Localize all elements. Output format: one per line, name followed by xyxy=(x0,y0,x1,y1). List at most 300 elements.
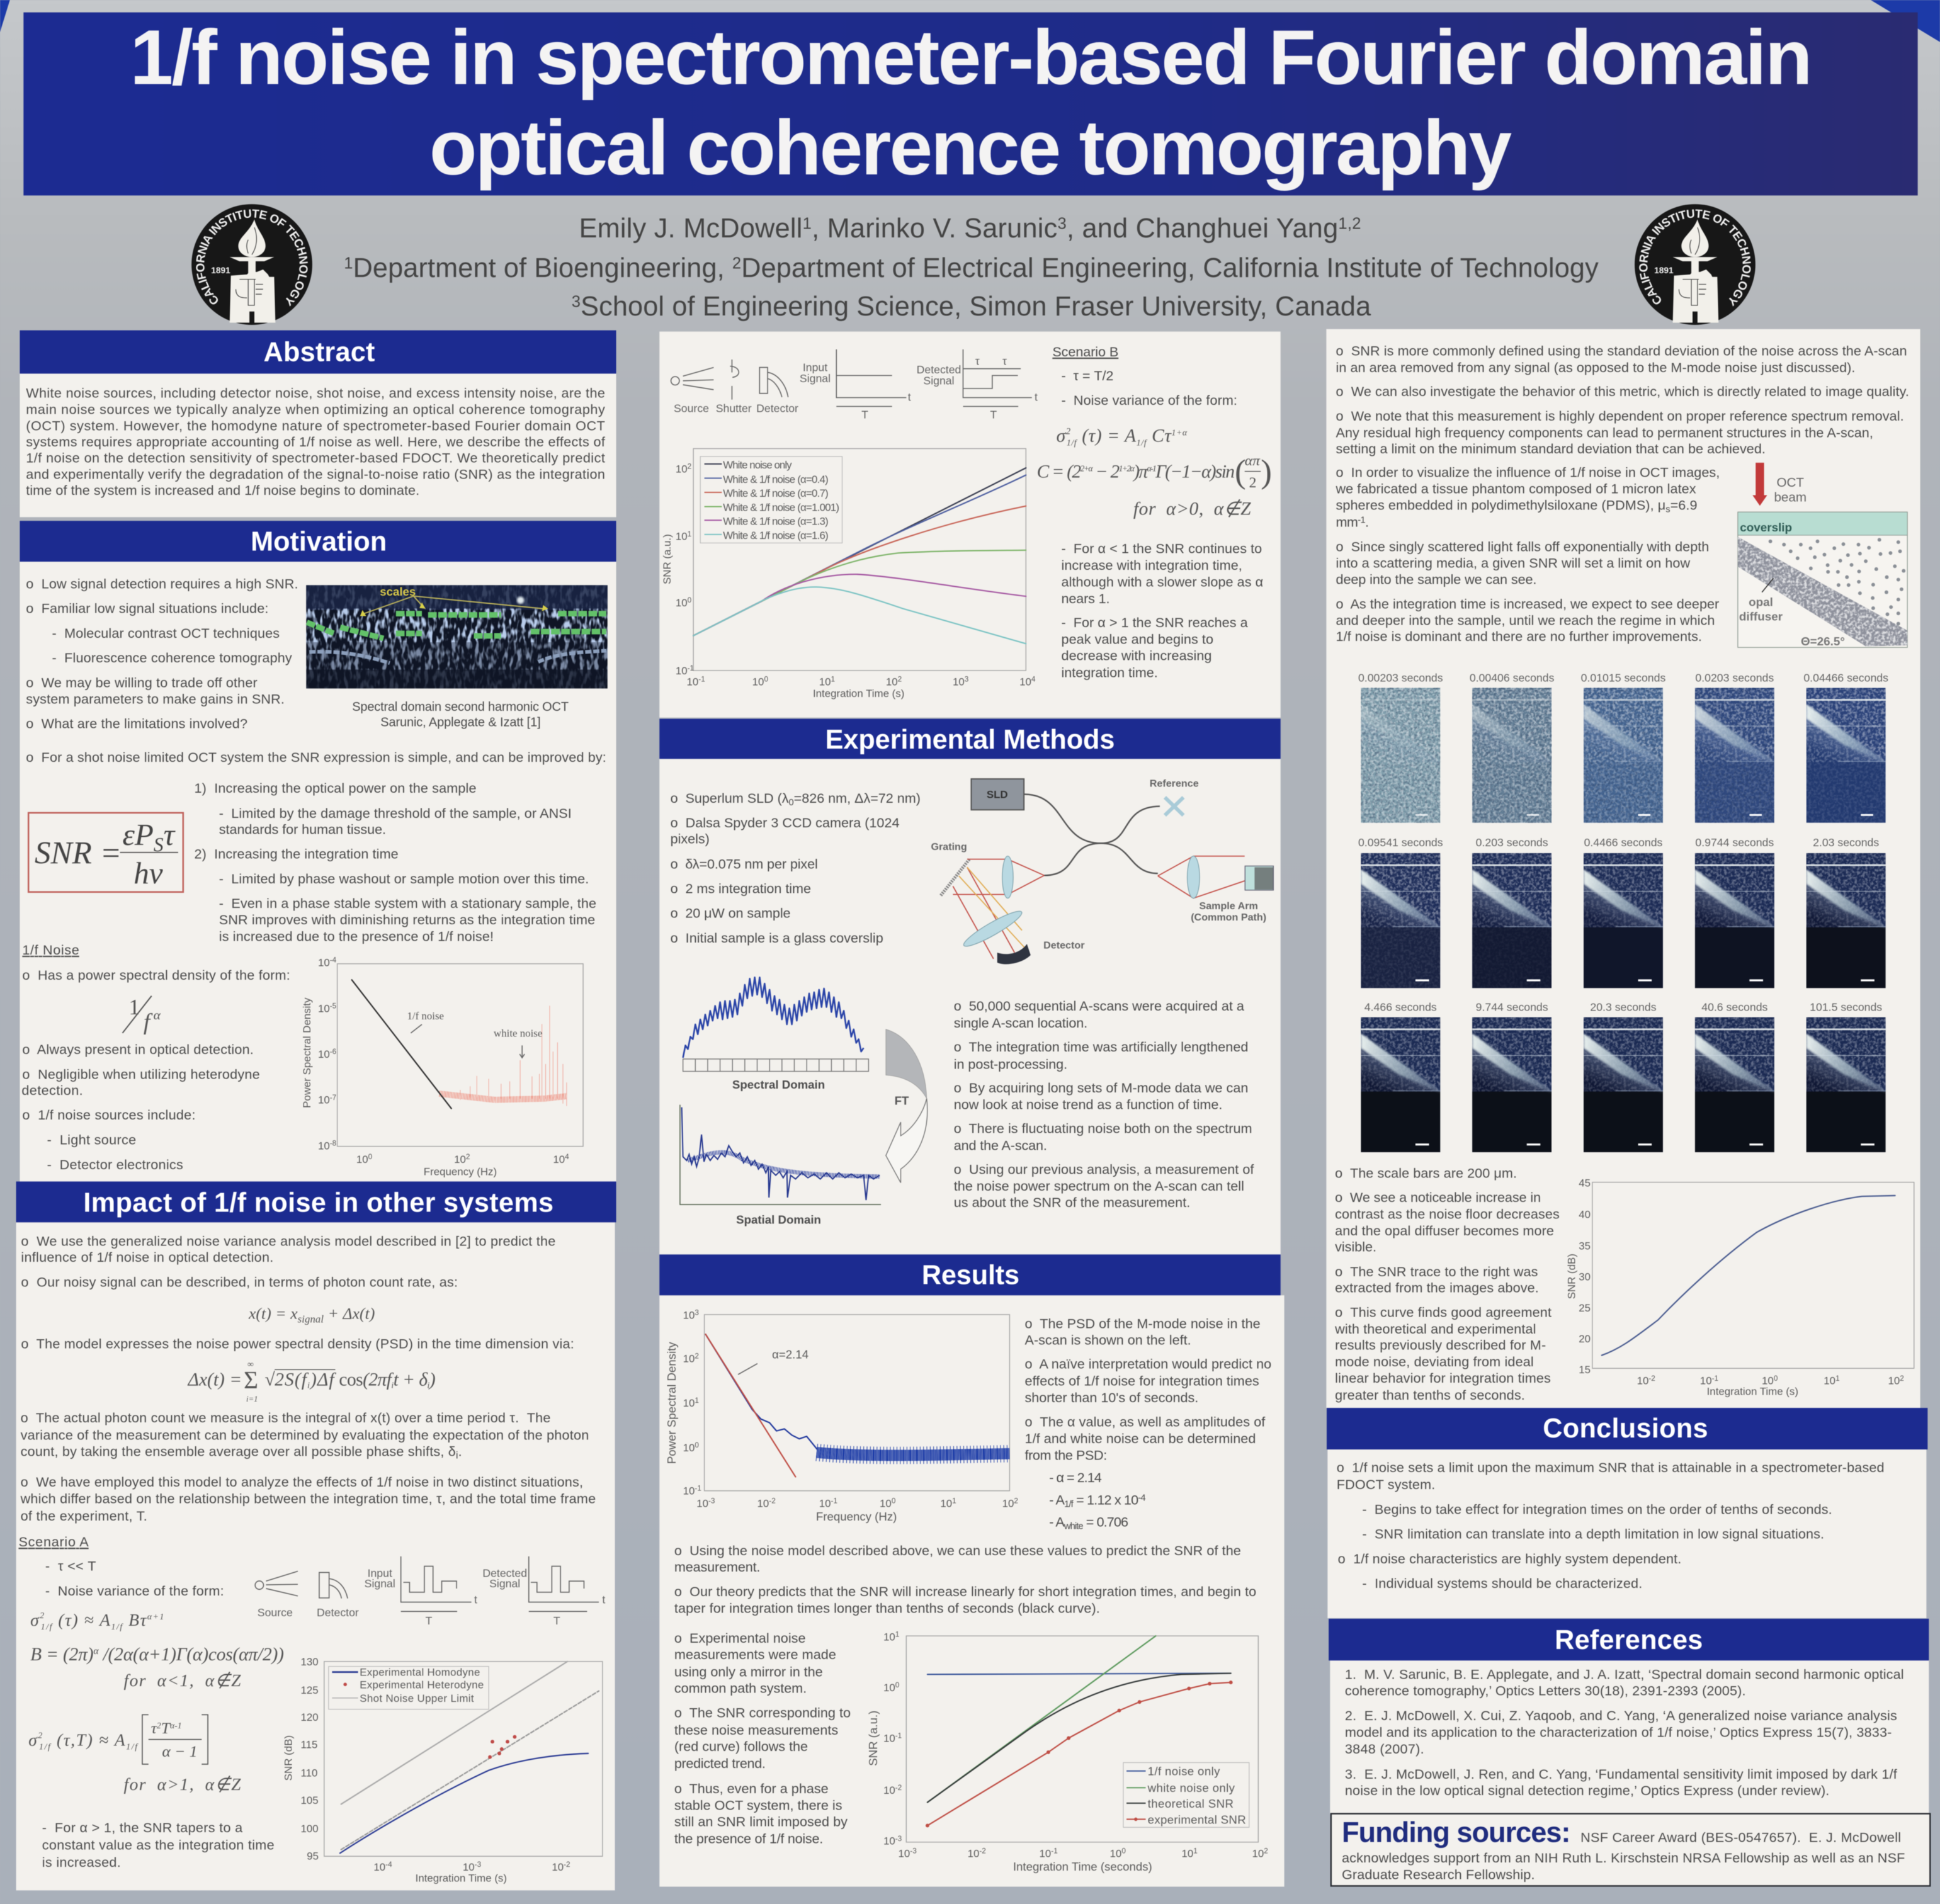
authors and affiliations: , and Changhuei Yang xyxy=(1067,213,1338,244)
equation: noise expansion: ∞ xyxy=(247,1359,254,1369)
equations: scenario B: απ xyxy=(1245,453,1261,469)
image analysis notes: o The SNR trace to the right was xyxy=(1335,1264,1538,1279)
results notes: experiment: still an SNR limit imposed by xyxy=(674,1814,848,1830)
chart: SNR for several alpha values: 10 xyxy=(819,676,831,688)
chart: theoretical and experimental SNR: -3 xyxy=(910,1847,917,1855)
chart: SNR from images: -2 xyxy=(1648,1374,1655,1383)
results notes: experiment: common path system. xyxy=(674,1680,807,1696)
title banner xyxy=(23,13,1918,195)
equations: scenario B: 1+2α xyxy=(1119,464,1135,473)
image metric notes: setting a limit on the minimum standard deviation that can be achieved. xyxy=(1336,441,1766,456)
image row labels: 0.9744 seconds xyxy=(1695,836,1774,849)
chart: measured noise PSD: 10 xyxy=(880,1497,892,1509)
image metric notes: o In order to visualize the influence of 1/f noise in OCT images, xyxy=(1336,465,1720,480)
diagram: tissue phantom: Θ=26.5° xyxy=(1801,635,1845,648)
image analysis notes: with theoretical and experimental xyxy=(1334,1321,1536,1337)
chart: power spectral density: -7 xyxy=(330,1094,336,1102)
authors and affiliations: 3 xyxy=(1057,215,1067,233)
chart: power spectral density: 1/f noise xyxy=(407,1010,444,1022)
chart: SNR from images: 1 xyxy=(1835,1374,1840,1383)
diagram: fiber OCT system: Sample Arm xyxy=(1199,900,1258,912)
image analysis notes: visible. xyxy=(1335,1239,1376,1255)
subheading: 1/f noise: 1/f Noise xyxy=(22,942,79,958)
reference list: 3. E. J. McDowell, J. Ren, and C. Yang, ‘Fundamental sensitivity limit imposed by dark 1/f xyxy=(1345,1766,1898,1782)
results notes: experiment: o The SNR corresponding to xyxy=(674,1704,851,1720)
diagram: scenario B signal schematic: Detected xyxy=(917,363,961,376)
motivation bullets: system parameters to make gains in SNR. xyxy=(26,691,285,707)
panel: funding sources xyxy=(1331,1814,1930,1886)
motivation bullets: - Molecular contrast OCT techniques xyxy=(52,625,280,641)
scenario B notes: integration time. xyxy=(1062,664,1158,680)
diagram: scenario A signal schematic: Source xyxy=(258,1606,293,1619)
scenario A note: is increased. xyxy=(42,1854,121,1870)
results notes: experiment: the presence of 1/f noise. xyxy=(674,1831,823,1847)
impact body text: of the experiment, T. xyxy=(21,1508,147,1524)
equations: scenario A: 2 xyxy=(38,1731,42,1740)
diagram: fiber OCT system: SLD xyxy=(987,788,1008,800)
chart: power spectral density: -6 xyxy=(330,1048,337,1056)
scenario B definition xyxy=(1062,368,1237,408)
diagram: fiber OCT system: Detector xyxy=(1043,939,1085,951)
conclusions text: FDOCT system. xyxy=(1337,1476,1435,1492)
scenario B notes: decrease with increasing xyxy=(1062,648,1211,664)
results notes: experiment: o Experimental noise xyxy=(674,1630,806,1646)
abstract body text xyxy=(26,385,606,498)
abstract body text: main noise sources we typically analyze when optimizing an optical coherence tomography xyxy=(26,401,605,417)
chart: SNR homodyne versus heterodyne: 120 xyxy=(300,1711,319,1723)
authors and affiliations: School of Engineering Science, Simon Fraser University, Canada xyxy=(581,292,1371,322)
diagram: scenario B signal schematic: t xyxy=(1035,391,1038,404)
icon: Caltech seal right: CALIFORNIA INSTITUTE OF TECHNOLOGY xyxy=(1638,209,1752,307)
improvement list: - Limited by phase washout or sample motion over this time. xyxy=(219,871,589,887)
improvement list: standards for human tissue. xyxy=(219,821,386,837)
equations: scenario A: α xyxy=(93,1646,99,1657)
diagram: scenario A signal schematic: Detected xyxy=(482,1567,527,1579)
methods notes: in post-processing. xyxy=(954,1056,1067,1072)
chart: SNR homodyne versus heterodyne: -3 xyxy=(475,1861,482,1869)
results notes: PSD: = 0.706 xyxy=(1083,1514,1128,1530)
image metric notes: o As the integration time is increased, we expect to see deeper xyxy=(1336,596,1719,611)
heading: funding sources: Funding sources: xyxy=(1342,1816,1570,1849)
image: 0.4466 seconds xyxy=(1584,853,1663,988)
image: 0.01015 seconds xyxy=(1584,688,1663,823)
results notes: PSD: shorter than 10's of seconds. xyxy=(1025,1390,1198,1405)
reference list: noise in the low optical signal detection regime,’ Optics Express (under review). xyxy=(1345,1782,1829,1798)
equations: scenario A: for α<1, α∉Z xyxy=(123,1670,241,1690)
panel: abstract xyxy=(20,331,616,517)
chart: theoretical and experimental SNR: 10 xyxy=(1110,1847,1121,1859)
equation: noise expansion: i xyxy=(307,1381,310,1390)
diagram: tissue phantom: opal xyxy=(1749,596,1773,609)
equations: scenario B: α-1 xyxy=(1147,464,1157,473)
image metric notes: we fabricated a tissue phantom composed of 1 micron latex xyxy=(1336,480,1696,496)
diagram: scenario B signal schematic: T xyxy=(861,409,868,421)
equation: 1/f to the alpha: f xyxy=(144,1009,153,1035)
equation: noise expansion: i xyxy=(428,1381,430,1390)
system parameters list: o Superlum SLD (λ xyxy=(671,790,789,806)
equations: scenario B: (τ) = A xyxy=(1077,426,1137,446)
results notes: PSD: = 1.12 x 10 xyxy=(1073,1492,1138,1507)
authors and affiliations: , Marinko V. Sarunic xyxy=(812,213,1057,244)
chart: measured noise PSD: -1 xyxy=(695,1485,701,1493)
chart: SNR for several alpha values: White & 1/f noise (α=1.6) xyxy=(723,530,829,541)
panel: experimental methods xyxy=(659,719,1281,1254)
chart: SNR from images: 0 xyxy=(1774,1374,1778,1383)
chart: theoretical and experimental SNR: 10 xyxy=(1252,1847,1264,1859)
heading: references: References xyxy=(1555,1625,1703,1655)
methods notes: o By acquiring long sets of M-mode data we can xyxy=(954,1080,1248,1096)
chart: SNR from images: 10 xyxy=(1888,1375,1900,1387)
chart: theoretical and experimental SNR: Integration Time (seconds) xyxy=(1013,1860,1152,1873)
chart: measured noise PSD: 10 xyxy=(940,1497,952,1509)
chart: SNR homodyne versus heterodyne: Experimental Homodyne xyxy=(360,1666,480,1678)
panel: scenario B xyxy=(659,332,1281,718)
image metric notes: and deeper into the sample, until we reach the regime in which xyxy=(1336,612,1715,628)
image: 2.03 seconds xyxy=(1807,853,1886,988)
system parameters list: =826 nm, Δλ=72 nm) xyxy=(794,790,921,806)
panel: references xyxy=(1329,1619,1929,1814)
chart: measured noise PSD: 10 xyxy=(757,1497,769,1509)
equations: scenario B: − 2 xyxy=(1092,462,1120,482)
improvement list: - Limited by the damage threshold of the sample, or ANSI xyxy=(219,805,572,821)
image row labels: 0.04466 seconds xyxy=(1803,672,1888,684)
chart: theoretical and experimental SNR: 2 xyxy=(1264,1847,1268,1855)
chart: theoretical and experimental SNR: 10 xyxy=(1040,1847,1051,1859)
diagram: scenario B signal schematic: τ xyxy=(975,355,980,368)
icon: OCT beam arrow: beam xyxy=(1774,490,1807,505)
image metric notes: into a scattering media, a given SNR will set a limit on how xyxy=(1336,555,1690,570)
chart: SNR homodyne versus heterodyne: Integration Time (s) xyxy=(416,1873,507,1884)
chart: SNR for several alpha values: -1 xyxy=(698,676,705,684)
equations: scenario A: 1/f xyxy=(126,1742,139,1751)
system parameters list: pixels) xyxy=(671,830,710,846)
image metric notes: o We note that this measurement is highly dependent on proper reference spectrum removal. xyxy=(1336,408,1904,424)
image row labels: 0.00203 seconds xyxy=(1358,672,1443,684)
diagram: scenario B signal schematic: Source xyxy=(674,402,709,414)
funding text: NSF Career Award (BES-0547657). E. J. McDowell xyxy=(1580,1830,1901,1845)
results notes: PSD: 1/f xyxy=(1064,1499,1074,1509)
image metric notes: =6.9 xyxy=(1671,497,1697,513)
chart: power spectral density: 10 xyxy=(454,1153,466,1165)
heading: impact: Impact of 1/f noise in other systems xyxy=(83,1188,553,1218)
scenario B notes: nears 1. xyxy=(1062,591,1110,606)
chart: theoretical and experimental SNR xyxy=(866,1631,1268,1873)
caption: OCT image xyxy=(352,700,569,729)
image row labels: 9.744 seconds xyxy=(1476,1000,1548,1013)
methods notes: us about the SNR of the measurement. xyxy=(954,1194,1190,1210)
chart: measured noise PSD: -2 xyxy=(769,1497,776,1505)
conclusions text: - SNR limitation can translate into a depth limitation in low signal situations. xyxy=(1362,1526,1824,1542)
equations: scenario A xyxy=(28,1610,284,1794)
image: 40.6 seconds xyxy=(1695,1017,1774,1152)
chart: theoretical and experimental SNR: -2 xyxy=(979,1847,986,1855)
chart: SNR for several alpha values: White noise only xyxy=(723,459,792,471)
impact body text: o Our noisy signal can be described, in terms of photon count rate, as: xyxy=(21,1274,458,1290)
equations: scenario A: α-1 xyxy=(170,1721,182,1730)
authors and affiliations: 1 xyxy=(803,215,812,233)
scenario B notes: - For α > 1 the SNR reaches a xyxy=(1062,615,1249,630)
chart: SNR for several alpha values: SNR (a.u.) xyxy=(661,534,673,584)
chart: SNR for several alpha values: 1 xyxy=(831,676,835,684)
results notes: theory xyxy=(674,1543,1256,1616)
results notes: PSD: o The PSD of the M-mode noise in the xyxy=(1025,1316,1261,1332)
results notes: PSD: - A xyxy=(1049,1492,1065,1507)
chart: SNR from images: 10 xyxy=(1637,1375,1648,1387)
image row labels: 20.3 seconds xyxy=(1590,1000,1657,1013)
results notes: PSD: -4 xyxy=(1138,1493,1146,1503)
diagram: fiber OCT system: Reference xyxy=(1150,778,1199,790)
motivation bullets: o Low signal detection requires a high SNR. xyxy=(26,575,298,591)
chart: SNR homodyne versus heterodyne: SNR (dB) xyxy=(283,1735,295,1781)
equations: scenario B: C = (2 xyxy=(1037,462,1081,482)
1/f noise bullets: o Negligible when utilizing heterodyne xyxy=(22,1066,260,1082)
equations: scenario A: /(2α(α+1)Γ(α)cos(απ/2)) xyxy=(98,1645,284,1665)
impact body text: o The model expresses the noise power spectral density (PSD) in the time dimension via: xyxy=(21,1336,574,1352)
methods notes: o There is fluctuating noise both on the spectrum xyxy=(954,1120,1252,1136)
abstract body text: (OCT) system. However, the homodyne nature of spectrometer-based Fourier domain OCT xyxy=(26,417,605,433)
icon: OCT beam arrow: OCT xyxy=(1776,475,1804,490)
chart: power spectral density: white noise xyxy=(494,1028,542,1040)
chart: SNR for several alpha values xyxy=(661,448,1036,700)
diagram: scenario B signal schematic xyxy=(671,349,1038,421)
results notes: PSD xyxy=(1025,1316,1271,1532)
results notes: PSD: o The α value, as well as amplitudes of xyxy=(1025,1414,1266,1430)
equations: scenario A: α − 1 xyxy=(162,1742,198,1760)
chart: SNR from images: 40 xyxy=(1579,1208,1591,1220)
chart: SNR homodyne versus heterodyne: 130 xyxy=(300,1656,319,1668)
image row labels: 2.03 seconds xyxy=(1813,836,1879,849)
chart: SNR for several alpha values: 10 xyxy=(953,676,965,688)
system parameters list: o Dalsa Spyder 3 CCD camera (1024 xyxy=(671,815,899,830)
image metric notes: in an area removed from any signal (as opposed to the M-mode noise just discussed). xyxy=(1336,360,1855,375)
equation: noise expansion: t + δ xyxy=(394,1370,428,1390)
diagram: spectral domain trace xyxy=(683,977,868,1091)
chart: SNR for several alpha values: 0 xyxy=(764,676,768,684)
chart: theoretical and experimental SNR: 10 xyxy=(883,1784,895,1796)
conclusions text: - Begins to take effect for integration times on the order of tenths of seconds. xyxy=(1362,1501,1832,1517)
results notes: PSD: - A xyxy=(1049,1514,1065,1530)
callout: SNR equation: hν xyxy=(133,856,163,890)
image metric notes: spheres embedded in polydimethylsiloxane (PDMS), μ xyxy=(1336,497,1665,513)
funding text xyxy=(1342,1830,1905,1883)
equations: scenario A: τ xyxy=(151,1719,157,1737)
image: 20.3 seconds xyxy=(1584,1017,1663,1152)
image analysis notes: o This curve finds good agreement xyxy=(1335,1305,1551,1320)
equations: scenario B: 2 xyxy=(1249,475,1256,491)
image row labels: 0.4466 seconds xyxy=(1584,836,1663,849)
chart: SNR for several alpha values: 2 xyxy=(688,463,691,471)
equations: scenario A: 1/f xyxy=(41,1622,54,1631)
chart: theoretical and experimental SNR: white noise only xyxy=(1147,1781,1235,1794)
equations: scenario A: 2 xyxy=(40,1611,44,1620)
equation: noise expansion xyxy=(188,1359,436,1403)
callout: SNR equation: εP xyxy=(123,817,154,852)
panel: impact of 1/f noise xyxy=(16,1181,616,1890)
motivation bullets: o We may be willing to trade off other xyxy=(26,675,258,691)
chart: measured noise PSD: 3 xyxy=(695,1309,699,1317)
results notes: PSD: effects of 1/f noise for integration times xyxy=(1025,1373,1259,1389)
impact body text: o We have employed this model to analyze the effects of 1/f noise in two distinct situations, xyxy=(21,1474,583,1490)
title text: optical coherence tomography xyxy=(429,105,1512,191)
title text xyxy=(130,14,1813,191)
equation: signal: x(t) = x xyxy=(249,1305,298,1323)
impact body text: variance of the measurement can be determined by evaluating the expectation of the photon xyxy=(21,1427,589,1442)
conclusions text xyxy=(1337,1459,1885,1591)
equations: scenario A: Bτ xyxy=(123,1610,147,1629)
chart: power spectral density: 0 xyxy=(368,1153,373,1161)
diagram: scenario A signal schematic: Input xyxy=(368,1567,392,1579)
equation: noise expansion: cos(2πf xyxy=(339,1370,392,1390)
scenario A note xyxy=(42,1820,275,1870)
equation: noise expansion: Σ xyxy=(244,1367,258,1394)
authors and affiliations xyxy=(344,213,1599,322)
image analysis notes: linear behavior for integration times xyxy=(1335,1370,1551,1386)
improvement list: 1) Increasing the optical power on the sample xyxy=(194,780,476,796)
image: 9.744 seconds xyxy=(1472,1017,1551,1152)
equations: scenario B: Cτ xyxy=(1147,426,1172,446)
diagram: scenario B signal schematic: Shutter xyxy=(716,402,752,414)
image: 4.466 seconds xyxy=(1361,1017,1440,1152)
system parameters list: 0 xyxy=(789,798,794,808)
image row labels: 4.466 seconds xyxy=(1364,1000,1437,1013)
diagram: spatial domain trace: Spatial Domain xyxy=(736,1213,821,1226)
chart: SNR from images: SNR (dB) xyxy=(1565,1254,1577,1299)
chart: measured noise PSD: Frequency (Hz) xyxy=(816,1510,897,1523)
equations: scenario A: σ xyxy=(28,1730,37,1749)
system parameters list: o δλ=0.075 nm per pixel xyxy=(671,856,818,871)
image: second harmonic OCT xyxy=(306,585,608,688)
panel: conclusions xyxy=(1327,1408,1927,1618)
results notes: theory: o Our theory predicts that the SNR will increase linearly for short integration times, and begin to xyxy=(674,1584,1256,1599)
top corner frame accents xyxy=(0,0,1940,42)
chart: theoretical and experimental SNR: 0 xyxy=(1121,1847,1126,1855)
equations: scenario A: 1/f xyxy=(111,1622,123,1631)
image row labels xyxy=(1358,672,1888,1013)
heading: conclusions: Conclusions xyxy=(1543,1414,1708,1444)
equations: scenario B: Γ(−1−α)sin xyxy=(1155,462,1235,482)
equations: scenario B: )π xyxy=(1132,462,1149,482)
image metric notes: s xyxy=(1665,504,1671,514)
chart: SNR from images: 10 xyxy=(1824,1375,1835,1387)
image row labels: 0.00406 seconds xyxy=(1470,672,1555,684)
heading: abstract: Abstract xyxy=(264,337,375,368)
equation: noise expansion: i=1 xyxy=(246,1395,258,1403)
equations: scenario B: 1/f xyxy=(1137,438,1148,447)
diagram: scenario B signal schematic: Detector xyxy=(756,402,798,414)
results notes: theory: taper for integration times longer than tenths of seconds (black curve). xyxy=(674,1600,1100,1616)
diagram: scenario A signal schematic: Detector xyxy=(317,1606,359,1619)
diagram: scenario B signal schematic: Signal xyxy=(800,372,831,385)
chart: SNR for several alpha values: 10 xyxy=(1019,676,1031,688)
chart: measured noise PSD: 10 xyxy=(683,1352,695,1364)
chart: SNR homodyne versus heterodyne: Shot Noise Upper Limit xyxy=(360,1692,474,1704)
chart: power spectral density xyxy=(301,956,583,1178)
methods notes: o 50,000 sequential A-scans were acquired at a xyxy=(954,998,1245,1014)
results notes: PSD: A-scan is shown on the left. xyxy=(1025,1332,1191,1348)
diagram: scenario B signal schematic: Signal xyxy=(923,375,955,387)
results notes: experiment: (red curve) follows the xyxy=(674,1738,808,1754)
chart: SNR homodyne versus heterodyne: 10 xyxy=(552,1861,564,1873)
callout: SNR equation: SNR = xyxy=(35,836,122,871)
results notes: experiment: using only a mirror in the xyxy=(674,1663,823,1679)
chart: power spectral density: 10 xyxy=(318,1048,330,1060)
chart: measured noise PSD: 0 xyxy=(695,1441,699,1449)
equations: scenario A: (τ) ≈ A xyxy=(53,1610,110,1629)
diagram: scenario B signal schematic: t xyxy=(908,391,911,404)
equation: noise expansion: ) xyxy=(428,1370,436,1390)
chart: theoretical and experimental SNR: 10 xyxy=(883,1682,895,1694)
chart: power spectral density: -8 xyxy=(330,1140,337,1148)
diagram: tissue phantom: coverslip xyxy=(1740,521,1792,534)
diagram: fiber OCT system: (Common Path) xyxy=(1191,912,1266,923)
conclusions text: o 1/f noise sets a limit upon the maximum SNR that is attainable in a spectrometer-based xyxy=(1337,1459,1885,1475)
system parameters list: o Initial sample is a glass coverslip xyxy=(671,930,883,946)
results notes: PSD: from the PSD: xyxy=(1025,1447,1107,1463)
panel: results xyxy=(659,1254,1285,1886)
chart: measured noise PSD xyxy=(665,1309,1018,1523)
callout: SNR equation: τ xyxy=(164,817,176,852)
icon: Caltech seal right: 1891 xyxy=(1654,266,1674,275)
methods notes xyxy=(954,998,1254,1210)
image metric notes: deep into the sample we can see. xyxy=(1336,571,1536,587)
image metric notes: Any residual high frequency components can lead to permanent structures in the A-scan, xyxy=(1336,424,1873,440)
methods notes: now look at noise trend as a function of time. xyxy=(954,1097,1222,1113)
results notes: theory: measurement. xyxy=(674,1559,760,1575)
chart: measured noise PSD: 10 xyxy=(683,1442,695,1454)
methods notes: the noise power spectrum on the A-scan can tell xyxy=(954,1178,1244,1194)
scenario A note: constant value as the integration time xyxy=(42,1837,275,1853)
chart: SNR for several alpha values: White & 1/f noise (α=1.001) xyxy=(723,502,839,514)
callout: SNR equation: S xyxy=(154,834,164,856)
impact body text: which differ based on the relationship between the integration time, τ, and the total time frame xyxy=(20,1490,596,1506)
chart: theoretical and experimental SNR: 0 xyxy=(895,1681,900,1689)
scenario B definition: - τ = T/2 xyxy=(1062,368,1113,383)
chart: power spectral density: 2 xyxy=(466,1153,470,1161)
image row labels: 101.5 seconds xyxy=(1810,1000,1882,1013)
chart: SNR for several alpha values: 10 xyxy=(676,665,688,677)
chart: SNR from images: 30 xyxy=(1579,1271,1591,1283)
chart: SNR for several alpha values: Integration Time (s) xyxy=(813,688,904,700)
diagram: tissue phantom xyxy=(1737,512,1908,650)
1/f noise bullets xyxy=(21,967,290,1172)
chart: SNR homodyne versus heterodyne: 10 xyxy=(463,1861,475,1873)
chart: theoretical and experimental SNR: -3 xyxy=(895,1835,902,1843)
chart: theoretical and experimental SNR: 10 xyxy=(1182,1847,1193,1859)
chart: SNR from images: Integration Time (s) xyxy=(1707,1385,1798,1397)
authors and affiliations: 2 xyxy=(732,254,741,272)
equations: scenario B: 2+α xyxy=(1080,464,1093,473)
chart: power spectral density: 10 xyxy=(318,1002,330,1014)
image row labels: 0.09541 seconds xyxy=(1358,836,1443,849)
image analysis notes: results previously described for M- xyxy=(1335,1337,1546,1353)
scenario A note: - For α > 1, the SNR tapers to a xyxy=(42,1820,243,1835)
chart: SNR for several alpha values: 10 xyxy=(687,676,698,688)
subheading: scenario A: Scenario A xyxy=(18,1534,89,1550)
chart: SNR homodyne versus heterodyne: Experimental Heterodyne xyxy=(360,1679,484,1691)
1/f noise bullets: o Always present in optical detection. xyxy=(22,1041,254,1057)
authors and affiliations: 3 xyxy=(572,293,581,310)
chart: power spectral density: 10 xyxy=(318,957,330,969)
image analysis notes: o We see a noticeable increase in xyxy=(1335,1189,1541,1205)
chart: SNR for several alpha values: 10 xyxy=(886,676,898,688)
equations: scenario B xyxy=(1037,426,1272,519)
chart: theoretical and experimental SNR: theoretical SNR xyxy=(1148,1797,1234,1810)
image: 0.09541 seconds xyxy=(1361,853,1440,988)
equation: 1/f to the alpha xyxy=(123,994,161,1035)
impact body text xyxy=(20,1233,596,1524)
chart: SNR from images: 25 xyxy=(1579,1302,1591,1314)
image metric notes xyxy=(1336,343,1909,644)
